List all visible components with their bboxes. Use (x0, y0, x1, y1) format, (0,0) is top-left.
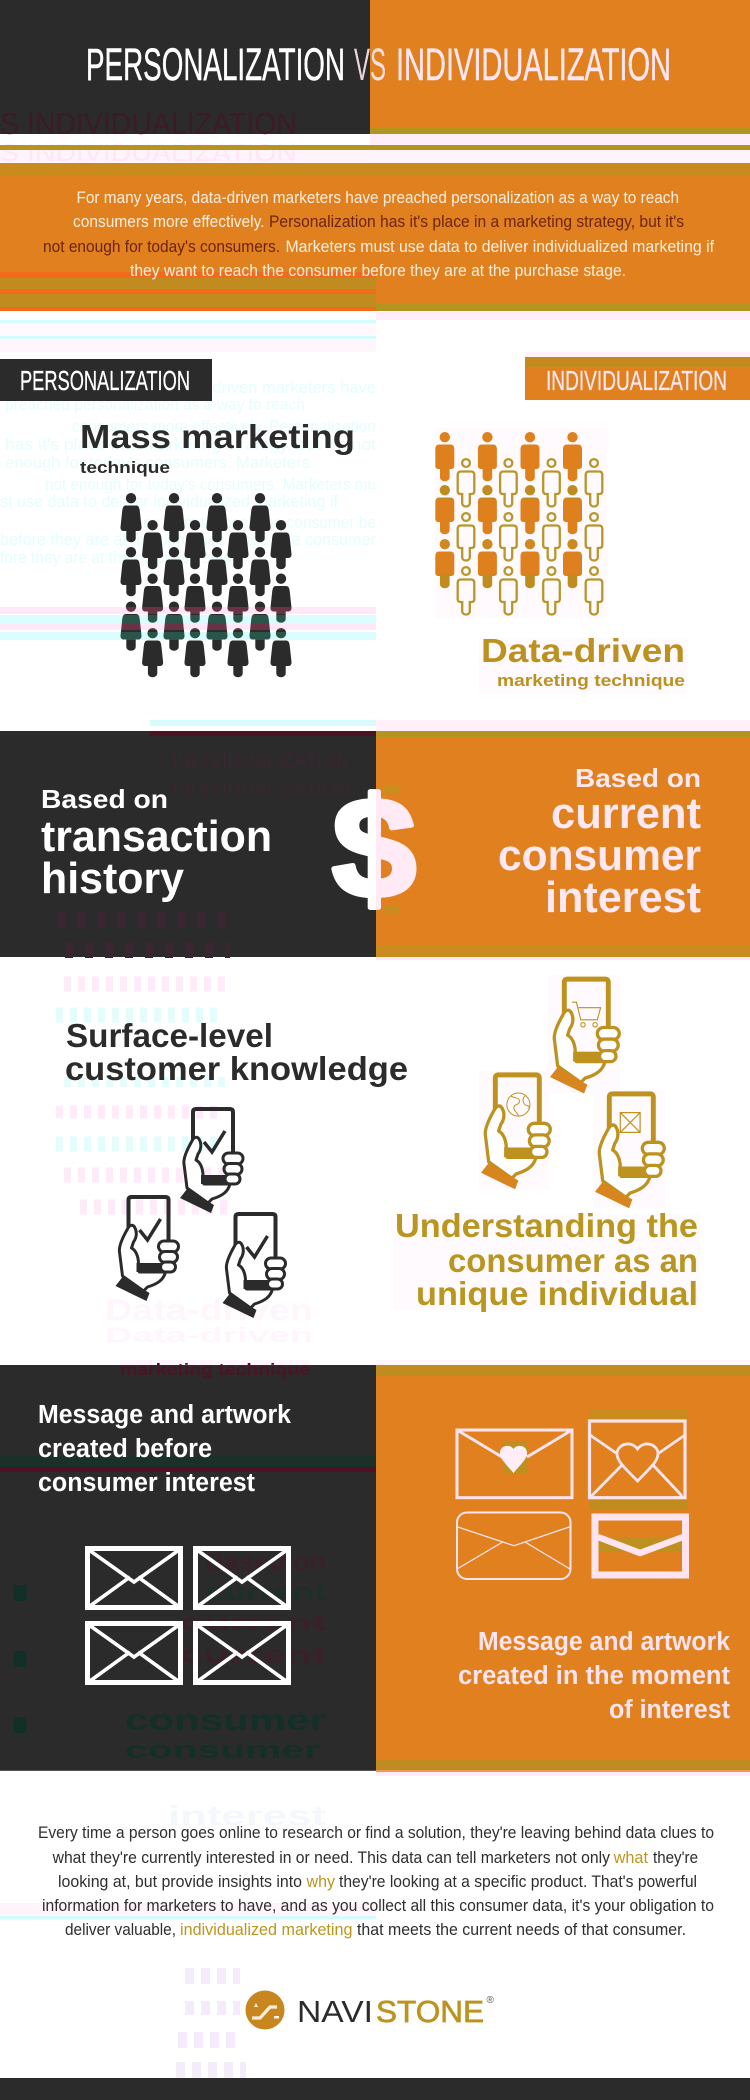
text: before they are at the purchase stage. the consumer (0, 530, 376, 549)
panel: transaction history: history (41, 854, 185, 903)
text block: closing paragraph: deliver valuable, (65, 1920, 176, 1939)
text: not enough for today's consumers. Marketers mu (45, 475, 376, 494)
panel: created before interest: Based on (205, 1549, 326, 1576)
heading: understanding the consumer: consumer as an (448, 1242, 698, 1279)
logo: navistone (246, 1990, 494, 2030)
text block: closing paragraph: that meets the current needs of that consumer. (357, 1920, 686, 1939)
label: personalization (0, 359, 212, 401)
text: enough for today's consumers. Marketers (5, 453, 310, 472)
heading: mass marketing: technique (80, 458, 170, 477)
panel: created before interest: created before (38, 1435, 212, 1463)
heading: mass marketing (80, 418, 355, 477)
panel: transaction history: INDIVIDUALIZATION (172, 751, 350, 773)
panel: current consumer interest: Based on (575, 763, 701, 793)
icon: crowd of identical dark people (120, 493, 292, 677)
logo: navistone: STONE (376, 1994, 484, 2029)
heading: data-driven (479, 632, 687, 694)
panel: created before interest: current (205, 1579, 326, 1606)
heading: surface-level customer knowledge (65, 1017, 408, 1087)
panel: created before interest: Message and artwork (38, 1401, 292, 1429)
panel: intro: consumers more effectively. (73, 212, 264, 231)
panel: current consumer interest: interest (545, 873, 701, 922)
heading: understanding the consumer: Understanding the (395, 1207, 698, 1244)
footer bar (0, 2078, 750, 2100)
heading: surface-level customer knowledge: customer knowledge (65, 1050, 408, 1087)
panel: created before interest: consumer interest (38, 1469, 255, 1497)
text block: closing paragraph: they're looking at a specific product. That's powerful (339, 1872, 697, 1891)
text: st use data to deliver individualized marketing if (0, 492, 338, 511)
icon: crowd of varied orange people (435, 432, 602, 614)
panel: transaction history: INDIVIDUALIZATION (172, 781, 350, 798)
panel: created in the moment: Message and artwork (478, 1628, 731, 1656)
panel: created before interest (0, 1360, 376, 1770)
panel: intro (0, 163, 750, 311)
panel: current consumer interest: consumer (498, 831, 701, 880)
icon: four identical envelopes (88, 1548, 288, 1682)
icon: dollar sign: $ (332, 769, 416, 928)
heading: data-driven: marketing technique (497, 671, 685, 690)
text: Data-driven (105, 1294, 313, 1327)
text block: closing paragraph: looking at, but provide insights into (58, 1872, 302, 1891)
text: has it's place in a marketing strategy, but it's not (5, 435, 376, 454)
text block: closing paragraph (38, 1823, 714, 1939)
panel: transaction history: transaction (41, 812, 272, 861)
text: interest (168, 1800, 326, 1831)
heading: data-driven: Data-driven (481, 632, 685, 669)
heading: surface-level customer knowledge: Surface-level (66, 1017, 273, 1054)
text: Data-driven (105, 1325, 313, 1347)
text block: closing paragraph: information for marketers to have, and as you collect all this consumer data, it's your obligation to (42, 1896, 714, 1915)
text: many years, data-driven marketers have (80, 378, 376, 397)
panel: transaction history (0, 731, 376, 957)
panel: current consumer interest (376, 731, 750, 960)
panel: current consumer interest: current (551, 789, 701, 838)
logo: navistone: ® (486, 1995, 494, 2006)
panel: intro: Personalization has it's place in a marketing strategy, but it's (269, 212, 684, 231)
panel: transaction history: Based on (41, 784, 168, 814)
icon: orange phones with cart, globe and mail (481, 979, 664, 1208)
panel: created before interest: marketing technique (120, 1360, 310, 1379)
title: PERSONALIZATION (86, 39, 345, 90)
panel: created in the moment: created in the moment (458, 1662, 731, 1690)
top banner panel (0, 0, 750, 167)
heading: understanding the consumer: unique individual (416, 1275, 698, 1312)
heading: mass marketing: Mass marketing (80, 418, 355, 455)
panel: created before interest: current (180, 1610, 327, 1635)
label: individualization (525, 357, 750, 400)
heading: understanding the consumer (395, 1207, 698, 1312)
text block: closing paragraph: individualized marketing (180, 1920, 352, 1939)
icon: four different envelopes (457, 1421, 686, 1579)
icon: dark phones with check marks (116, 1109, 286, 1318)
panel: intro: For many years, data-driven marketers have preached personalization as a way to reach (76, 188, 679, 207)
panel: created in the moment: of interest (609, 1696, 730, 1724)
panel: intro: they want to reach the consumer before they are at the purchase stage. (130, 261, 626, 280)
title: VS (354, 39, 386, 90)
panel: intro: Marketers must use data to deliver individualized marketing if (286, 237, 714, 256)
top banner panel: S INDIVIDUALIZATION (0, 106, 297, 141)
panel: created before interest: consumer (125, 1737, 320, 1764)
logo: navistone: NAVI (297, 1994, 373, 2029)
panel: created in the moment (376, 1365, 750, 1770)
text: fore they are at the purchase stage. (0, 548, 245, 567)
panel: intro: not enough for today's consumers. (43, 237, 280, 256)
text block: closing paragraph: why (306, 1872, 335, 1891)
text: consumers more effectively. Personalization (72, 417, 376, 436)
panel: created before interest: current (180, 1642, 326, 1669)
text block: closing paragraph: what they're currently interested in or need. This data can tell marketers not only (52, 1848, 610, 1867)
label: personalization: PERSONALIZATION (20, 365, 190, 396)
text block: closing paragraph: what (613, 1848, 648, 1867)
panel: created before interest: consumer (125, 1704, 326, 1737)
text: preached personalization as a way to reach (5, 395, 305, 414)
text: they want to reach the consumer be (130, 513, 376, 532)
text block: closing paragraph: they're (653, 1848, 698, 1867)
top banner panel: S INDIVIDUALIZATION (0, 140, 297, 167)
